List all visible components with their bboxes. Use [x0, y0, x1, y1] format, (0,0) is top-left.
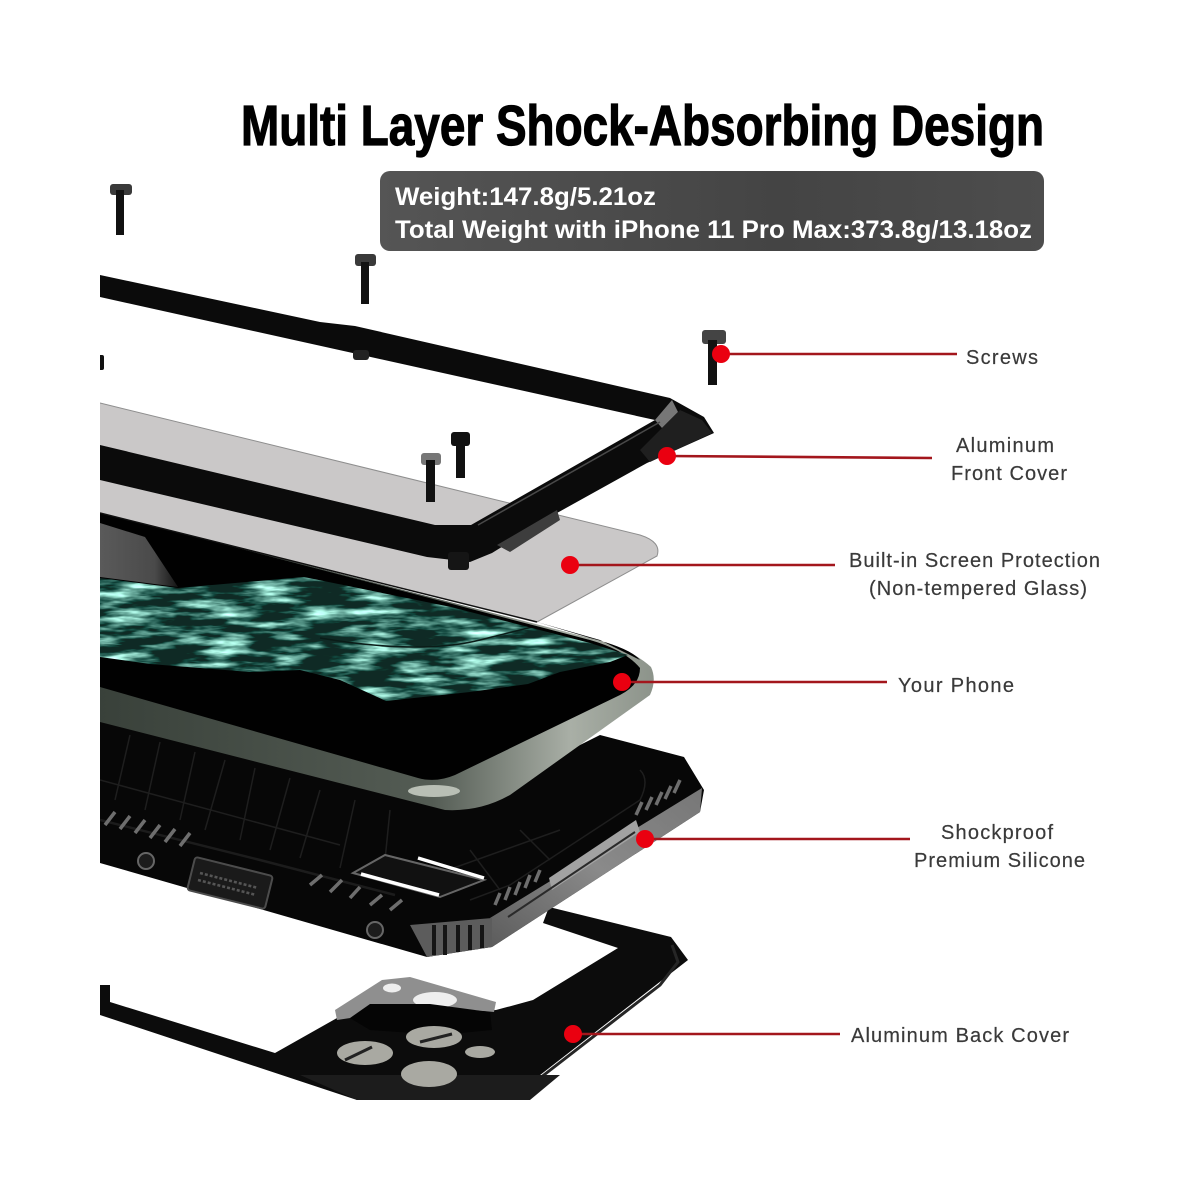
built-in screen protection glass	[100, 403, 658, 622]
inner ribs	[100, 735, 645, 900]
callout: silicone: Shockproof	[941, 822, 1053, 844]
callout: aluminum back cover: Aluminum Back Cover	[851, 1025, 1069, 1047]
callout: screen protection	[561, 550, 1100, 600]
callout: silicone	[636, 822, 1085, 872]
phone wallpaper waves	[100, 577, 628, 701]
callout: aluminum front cover: Front Cover	[951, 463, 1067, 485]
screws	[96, 184, 726, 502]
callout: your phone	[613, 673, 1014, 697]
phone	[100, 512, 654, 810]
shockproof silicone case	[100, 720, 704, 957]
aluminum back cover	[100, 907, 688, 1100]
callout: aluminum front cover: Aluminum	[956, 435, 1054, 457]
case side wall	[490, 788, 702, 947]
callout: screws	[712, 345, 1038, 369]
aluminum front cover	[100, 275, 714, 570]
weight info box: Total Weight with iPhone 11 Pro Max:373.8g/13.18oz	[395, 216, 1032, 244]
vents	[105, 780, 680, 910]
weight info box: Weight:147.8g/5.21oz	[395, 183, 656, 211]
callout: screen protection: (Non-tempered Glass)	[869, 578, 1087, 600]
weight info box	[380, 171, 1044, 251]
camera lenses	[337, 1026, 495, 1087]
callout: aluminum back cover	[564, 1025, 1069, 1047]
camera window	[353, 855, 484, 897]
cover screws	[448, 552, 469, 570]
callout: your phone: Your Phone	[898, 675, 1014, 697]
front corner ribs	[410, 918, 492, 957]
callout: screen protection: Built-in Screen Protection	[849, 550, 1100, 572]
exploded phone case illustration	[96, 184, 726, 1100]
callout: aluminum front cover	[658, 435, 1067, 485]
callout: silicone: Premium Silicone	[914, 850, 1085, 872]
phone top edge over glass	[537, 622, 640, 660]
camera plate	[335, 977, 496, 1020]
screws on case	[138, 853, 154, 869]
charging port	[187, 857, 273, 909]
callout: screws: Screws	[966, 347, 1038, 369]
